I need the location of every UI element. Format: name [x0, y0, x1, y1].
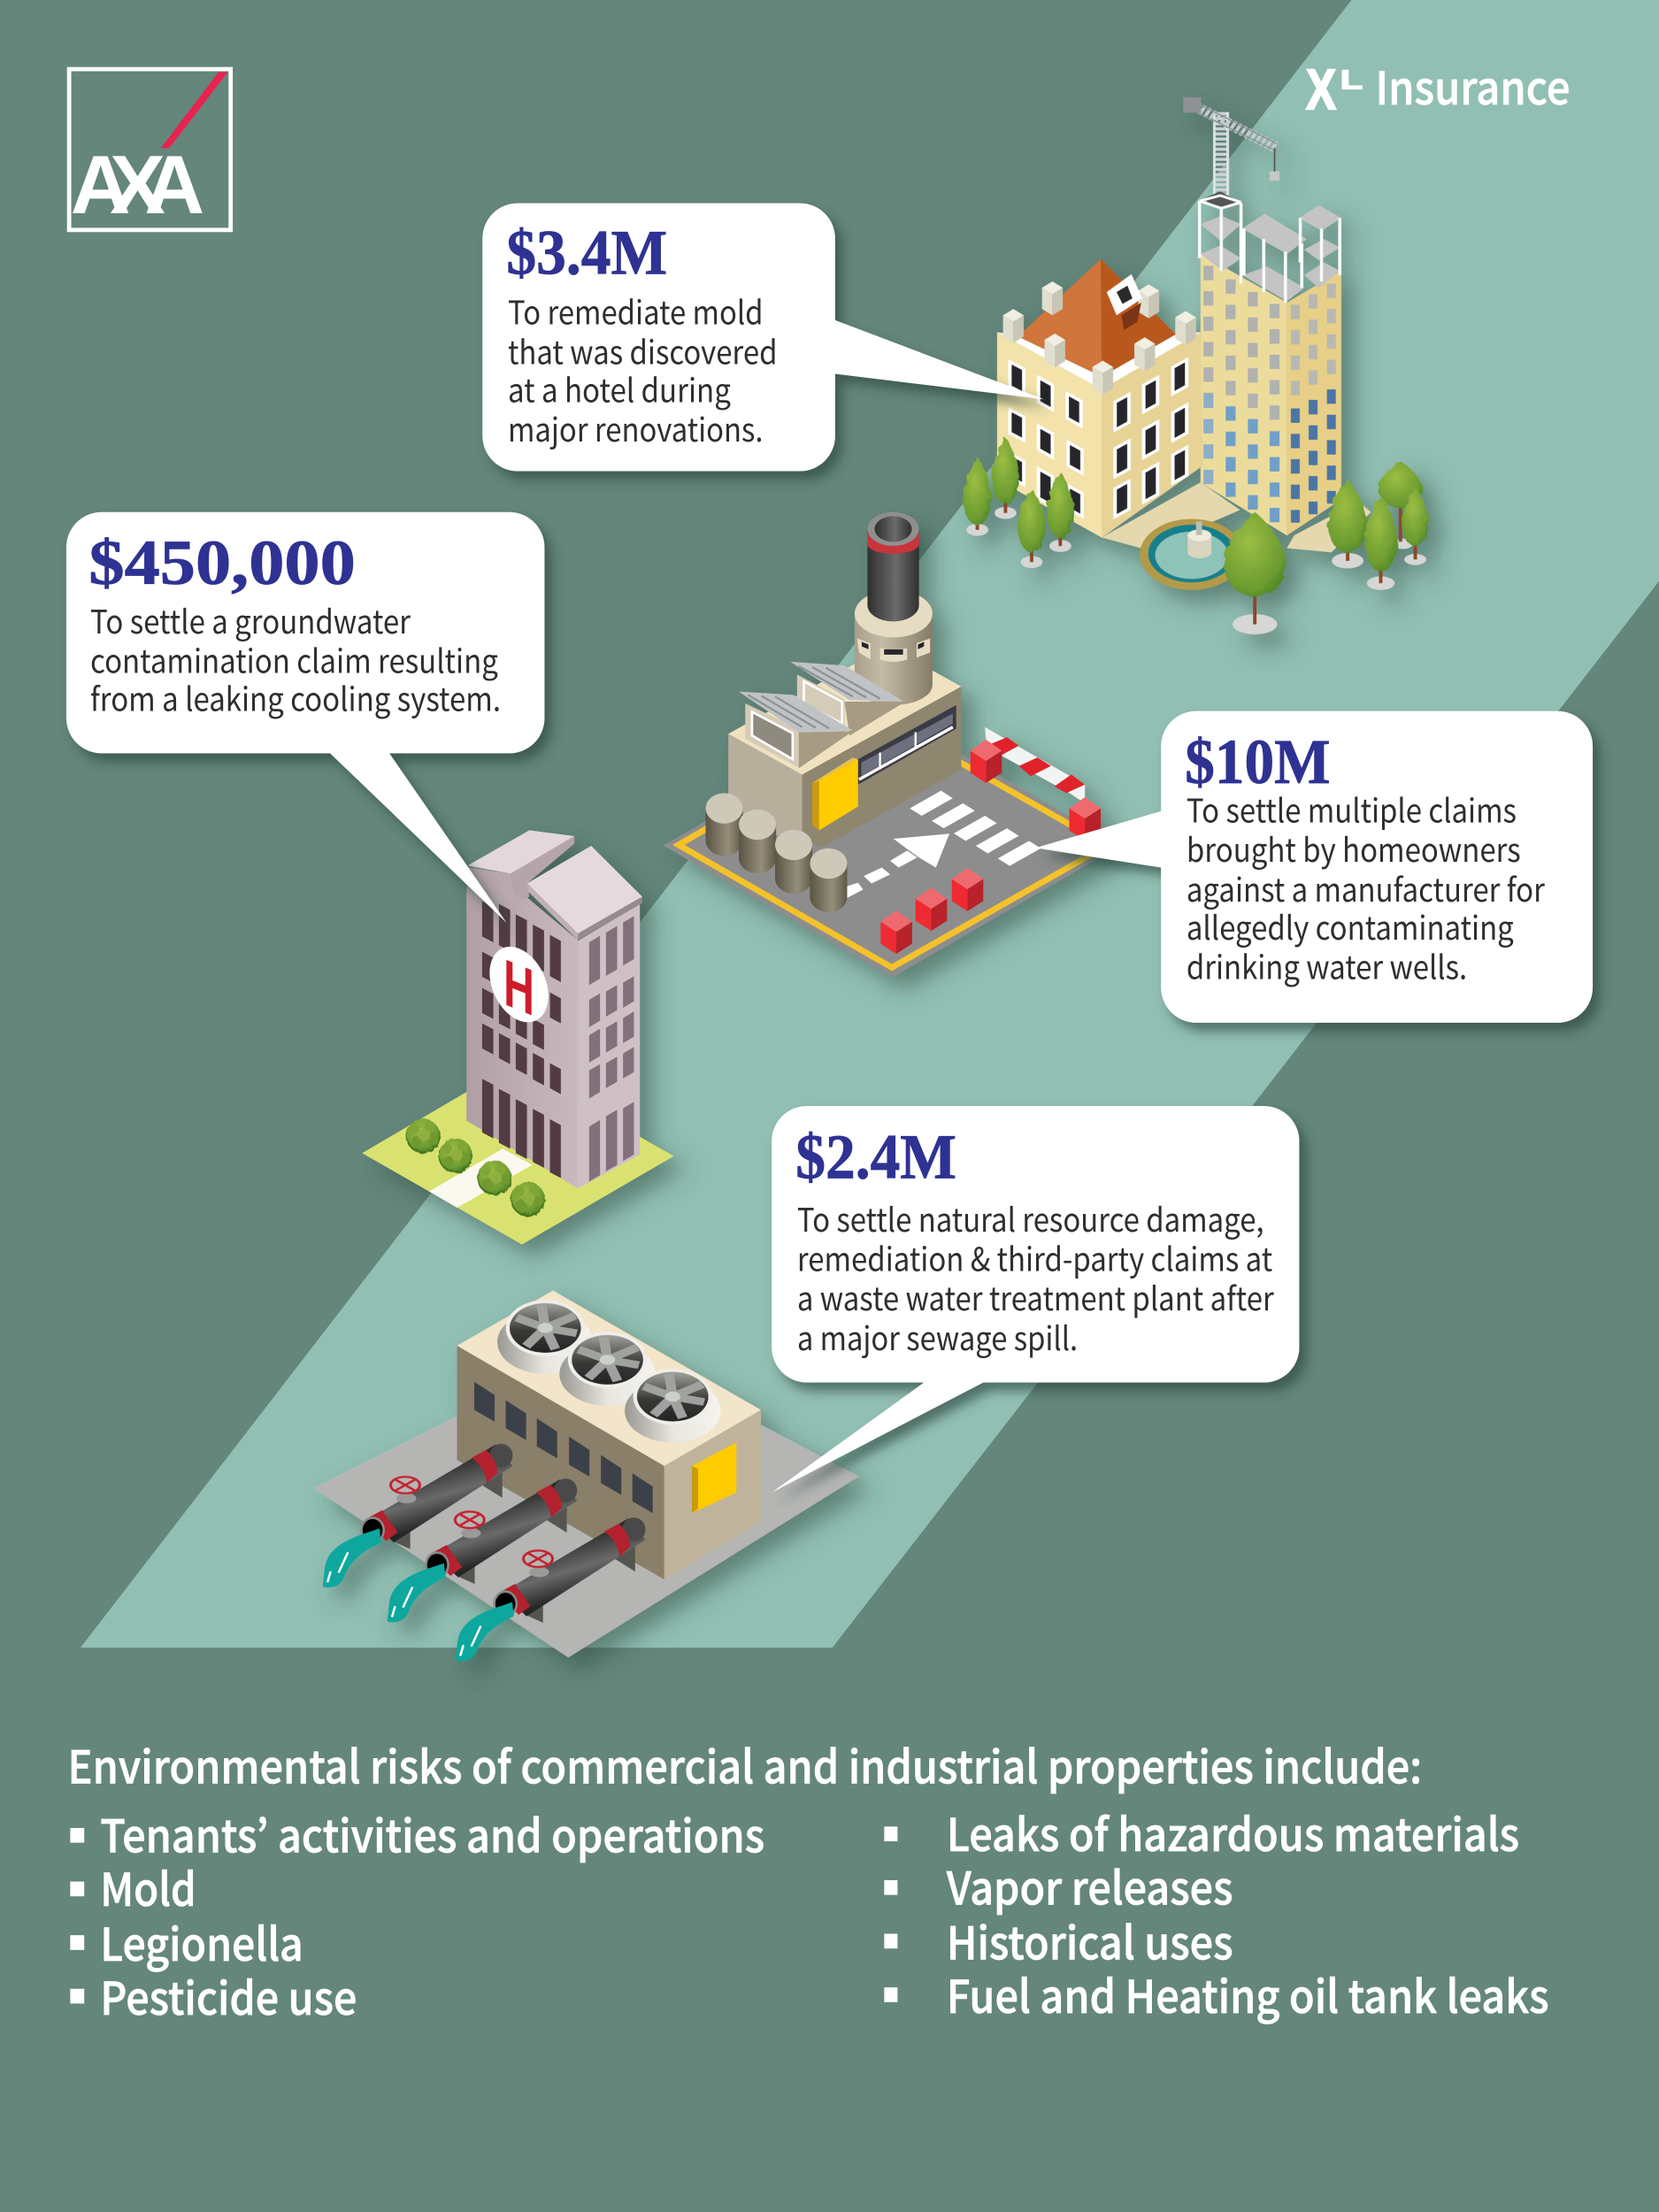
amount: $10M [1185, 726, 1331, 797]
callout shape [66, 512, 544, 923]
callout: $2.4M [772, 1106, 1299, 1493]
description: To settle a groundwater [90, 595, 411, 643]
hospital H sign: H [503, 944, 534, 1031]
callout: $450,000 [66, 512, 544, 923]
fountain [1140, 518, 1243, 590]
illustration: hotel under construction with crane [963, 97, 1429, 634]
description: remediation & third-party claims at [797, 1233, 1272, 1281]
amount: $2.4M [795, 1121, 956, 1192]
storage tanks [706, 793, 847, 912]
description [1187, 785, 1546, 989]
description: from a leaking cooling system. [90, 673, 501, 721]
XL Insurance logo: X [1306, 58, 1336, 121]
cooling fans [497, 1300, 720, 1442]
description [797, 1194, 1274, 1360]
lawn and path [362, 1064, 673, 1245]
risks list: right column: Leaks of hazardous materials [947, 1799, 1519, 1864]
description: that was discovered [508, 326, 778, 373]
callout shape [772, 1106, 1299, 1493]
risks list: right column: Fuel and Heating oil tank leaks [947, 1961, 1549, 2026]
risks list: left column: Mold [100, 1854, 196, 1919]
yellow sign [812, 757, 858, 830]
description: at a hotel during [508, 364, 731, 411]
callout: $3.4M [482, 204, 1044, 472]
skylights [739, 662, 905, 768]
description: contamination claim resulting [90, 635, 498, 683]
gate with striped barrier [971, 727, 1101, 841]
red barriers [880, 868, 983, 954]
description: To settle multiple claims [1187, 785, 1517, 833]
description: a waste water treatment plant after [797, 1272, 1274, 1320]
amount: $450,000 [88, 527, 356, 598]
hotel building [997, 259, 1203, 537]
light diagonal band [81, 0, 1659, 1647]
callout: $10M [1035, 711, 1593, 1023]
XL Insurance logo [1306, 52, 1571, 121]
XL Insurance logo: L [1340, 65, 1363, 95]
risks list: left column: Tenants’ activities and operations [100, 1800, 764, 1865]
risks list: left column [71, 1800, 764, 2028]
road markings [847, 791, 1041, 898]
plant building [457, 1290, 761, 1579]
description: To remediate mold [508, 287, 764, 334]
risks heading: Environmental risks of commercial and industrial properties include: [68, 1731, 1422, 1796]
illustration: factory [664, 512, 1120, 978]
description: drinking water wells. [1187, 941, 1467, 989]
risks list: left column: Legionella [100, 1909, 303, 1974]
illustration: waste water treatment plant [313, 1290, 859, 1661]
risks list: right column: Historical uses [947, 1908, 1233, 1973]
description: To settle natural resource damage, [797, 1194, 1264, 1241]
crane [1183, 97, 1279, 210]
illustration: hospital [362, 830, 673, 1245]
discharge pipes [323, 1444, 645, 1661]
trees [963, 438, 1429, 634]
amount: $3.4M [506, 217, 667, 288]
factory building [728, 646, 961, 849]
description [90, 595, 501, 721]
smokestack [855, 512, 933, 705]
AXA logo [69, 69, 231, 231]
window strip [858, 705, 956, 785]
description: a major sewage spill. [797, 1312, 1078, 1360]
callout shape [482, 204, 1044, 472]
tower under construction [1200, 196, 1341, 535]
description: allegedly contaminating [1187, 902, 1514, 949]
plant ground [313, 1342, 859, 1657]
description: against a manufacturer for [1187, 864, 1546, 911]
description: major renovations. [508, 403, 764, 451]
description: brought by homeowners [1187, 824, 1521, 872]
forecourt [1102, 482, 1240, 548]
description [508, 287, 778, 451]
risks list: right column: Vapor releases [946, 1852, 1233, 1917]
AXA logo: AXA [71, 138, 204, 231]
risks list: right column [885, 1799, 1549, 2026]
callout shape [1035, 711, 1593, 1023]
bushes [406, 1118, 545, 1217]
XL Insurance logo: Insurance [1376, 52, 1571, 118]
factory ground [664, 713, 1120, 978]
hospital building [466, 830, 642, 1188]
risks list: left column: Pesticide use [100, 1962, 357, 2028]
hospital H sign [478, 937, 560, 1032]
